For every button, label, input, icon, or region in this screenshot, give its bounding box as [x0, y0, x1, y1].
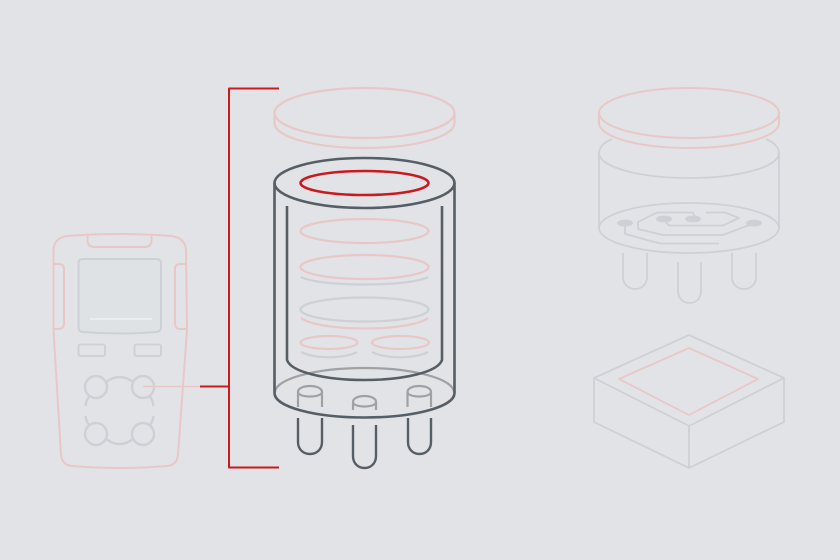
connector line from detector [143, 386, 200, 388]
screen [78, 259, 161, 334]
screen highlight [90, 318, 152, 320]
red bracket [200, 88, 279, 468]
device outline [54, 234, 187, 468]
sensor body [599, 139, 779, 253]
filter disc [274, 88, 454, 148]
assembled sensor (faded) [599, 88, 779, 303]
base back edge and inner pins [275, 368, 454, 410]
sensor slots [85, 376, 154, 445]
handheld gas detector [54, 234, 187, 468]
circuit traces [618, 212, 761, 244]
pins [623, 253, 756, 303]
chip inset [619, 348, 758, 415]
inner stack of layers [300, 219, 429, 357]
top tab [88, 236, 152, 247]
left side grip [54, 264, 64, 329]
right button [134, 344, 161, 356]
chip package [594, 335, 784, 468]
red seal ring [300, 171, 428, 195]
exploded sensor [274, 88, 454, 468]
filter disc on top [599, 88, 779, 148]
outer pins [298, 418, 431, 468]
sensor housing [274, 158, 454, 418]
box [594, 335, 784, 468]
left button [78, 344, 105, 356]
right side grip [175, 264, 186, 329]
